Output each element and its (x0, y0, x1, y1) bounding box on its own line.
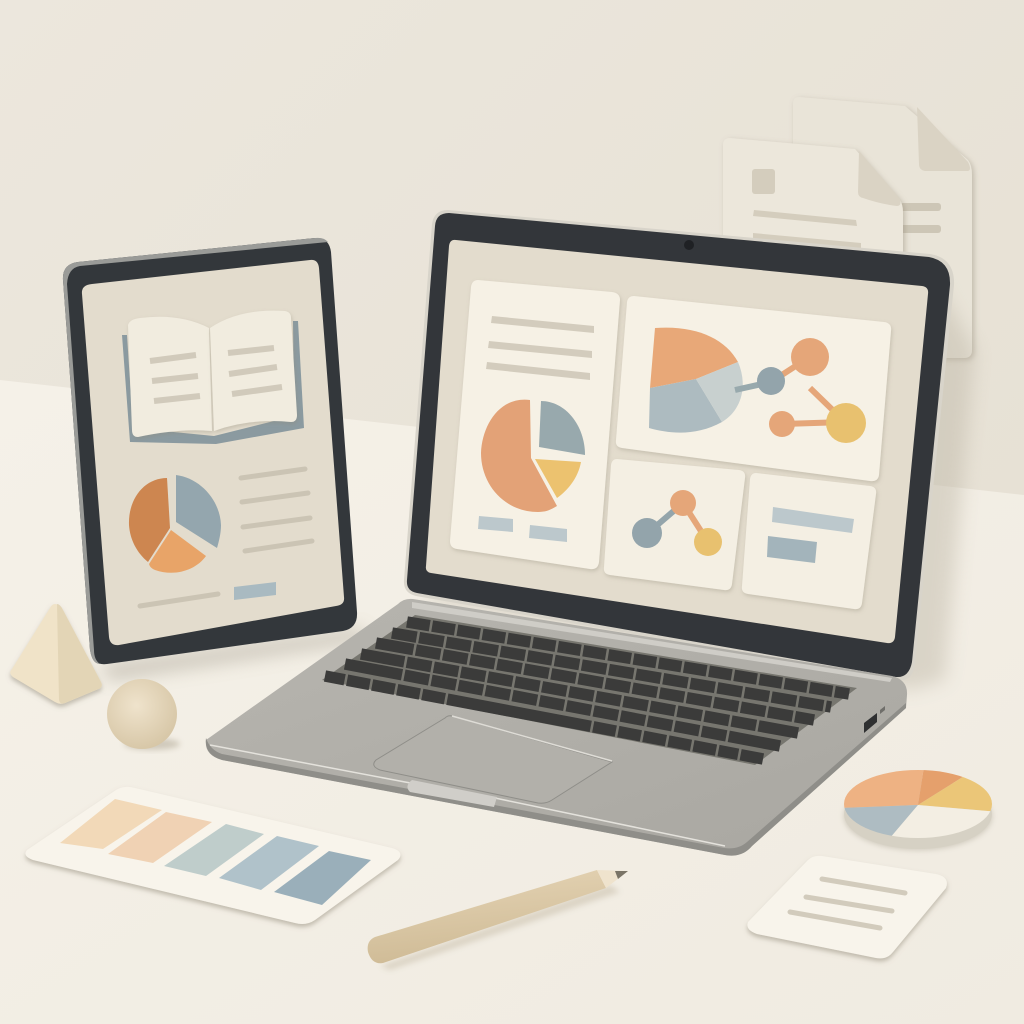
open book icon (122, 311, 304, 444)
keyboard (322, 615, 857, 765)
swatch: peach light (60, 799, 162, 849)
webcam (684, 240, 694, 250)
laptop screen lid (404, 210, 954, 680)
tablet pie chart (129, 475, 221, 573)
tablet (63, 238, 357, 664)
tablet shadow (100, 628, 368, 680)
back document (793, 97, 972, 358)
sphere (107, 679, 180, 750)
panel: text and pie card (450, 280, 620, 569)
pyramid (10, 604, 102, 704)
front document (723, 138, 903, 270)
tablet display (82, 260, 344, 645)
small pie disc (842, 770, 994, 852)
laptop base (206, 599, 907, 856)
side ports (864, 706, 885, 733)
swatch card (25, 787, 400, 924)
panel: bars card (742, 473, 876, 609)
network nodes (735, 338, 866, 443)
legend chips (478, 516, 513, 532)
pie chart (481, 400, 585, 512)
tablet button (234, 582, 276, 600)
laptop shadow (420, 270, 975, 690)
background floor (0, 380, 1024, 1024)
trackpad (374, 716, 612, 807)
panel: large chart card (616, 296, 891, 481)
swatch: peach (108, 812, 212, 863)
swatch: slate (274, 851, 371, 905)
swatch: blue grey (219, 836, 319, 890)
pencil (368, 870, 628, 970)
tablet text lines (140, 469, 312, 606)
swatch: sage (164, 824, 264, 876)
note card (747, 856, 947, 958)
laptop screen display (426, 240, 928, 643)
panel: network card (604, 459, 745, 590)
segmented chart (649, 328, 743, 433)
